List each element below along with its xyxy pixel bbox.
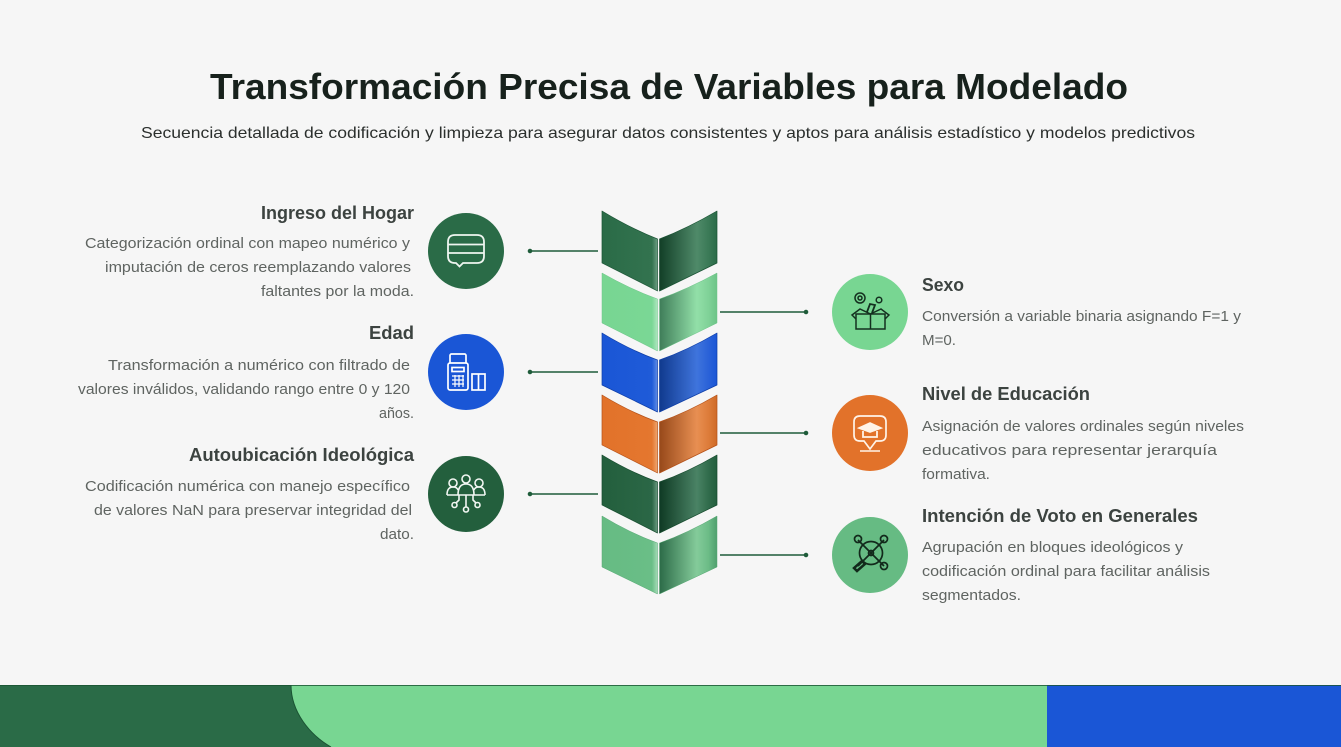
text block: Nivel de Educación: formativa. bbox=[922, 467, 990, 483]
text block: Nivel de Educación: educativos para representar jerarquía bbox=[922, 443, 1218, 459]
text block: Edad bbox=[78, 323, 414, 422]
footer band bbox=[0, 685, 1341, 747]
chevron segment 4: orange bbox=[602, 395, 717, 473]
text block: Edad: Transformación a numérico con filtrado de bbox=[108, 358, 410, 374]
chevron segment 5: dark green bbox=[602, 455, 717, 533]
text block: Intención de Voto en Generales bbox=[922, 506, 1210, 604]
title: Transformación Precisa de Variables para Modelado bbox=[210, 66, 1128, 107]
text block: Ingreso del Hogar: imputación de ceros reemplazando valores bbox=[105, 260, 411, 276]
text block: Edad: Edad bbox=[369, 323, 414, 343]
connector: Intención de Voto bbox=[720, 553, 808, 557]
text block: Sexo: Conversión a variable binaria asignando F=1 y bbox=[922, 309, 1242, 325]
chevron segment 3: blue bbox=[602, 333, 717, 412]
text block: Nivel de Educación: Asignación de valores ordinales según niveles bbox=[922, 419, 1244, 435]
text block: Autoubicación Ideológica: dato. bbox=[380, 527, 414, 543]
connector: Edad bbox=[528, 370, 598, 374]
connector: Nivel de Educación bbox=[720, 431, 808, 435]
text block: Intención de Voto en Generales: Agrupación en bloques ideológicos y bbox=[922, 540, 1184, 556]
text block: Ingreso del Hogar bbox=[85, 203, 414, 300]
text block: Edad: años. bbox=[379, 406, 414, 422]
connector: Autoubicación Ideológica bbox=[528, 492, 598, 496]
icon: Edad, payment terminal bbox=[428, 334, 504, 410]
icon: Intención de Voto, target network bbox=[832, 517, 908, 593]
text block: Ingreso del Hogar: Ingreso del Hogar bbox=[261, 203, 414, 223]
text block: Sexo bbox=[922, 275, 1242, 349]
text block: Edad: valores inválidos, validando rango entre 0 y 120 bbox=[78, 382, 410, 398]
subtitle: Secuencia detallada de codificación y limpieza para asegurar datos consistentes y aptos para análisis estadístico y modelos predictivos bbox=[141, 125, 1195, 142]
connector: Ingreso del Hogar bbox=[528, 249, 598, 253]
text block: Intención de Voto en Generales: codificación ordinal para facilitar análisis bbox=[922, 564, 1210, 580]
text block: Autoubicación Ideológica: Codificación numérica con manejo específico bbox=[85, 479, 410, 495]
text block: Ingreso del Hogar: Categorización ordinal con mapeo numérico y bbox=[85, 236, 411, 252]
text block: Autoubicación Ideológica: de valores NaN para preservar integridad del bbox=[94, 503, 412, 519]
text block: Sexo: Sexo bbox=[922, 275, 964, 295]
text block: Intención de Voto en Generales: Intención de Voto en Generales bbox=[922, 506, 1198, 526]
icon: Autoubicación Ideológica, group network bbox=[428, 456, 504, 532]
icon: Sexo, open box bbox=[832, 274, 908, 350]
chevron segment 6: medium green bbox=[602, 516, 717, 594]
text block: Intención de Voto en Generales: segmentados. bbox=[922, 588, 1021, 604]
text block: Nivel de Educación bbox=[922, 384, 1244, 483]
chevron column bbox=[602, 211, 717, 594]
icon: Nivel de Educación, graduation cap pin bbox=[832, 395, 908, 471]
icon: Ingreso del Hogar, message card bbox=[428, 213, 504, 289]
text block: Ingreso del Hogar: faltantes por la moda. bbox=[261, 284, 414, 300]
text block: Sexo: M=0. bbox=[922, 333, 956, 349]
text block: Autoubicación Ideológica bbox=[85, 445, 415, 543]
text block: Autoubicación Ideológica: Autoubicación Ideológica bbox=[189, 445, 415, 465]
text block: Nivel de Educación: Nivel de Educación bbox=[922, 384, 1090, 404]
connector: Sexo bbox=[720, 310, 808, 314]
chevron segment 2: light green bbox=[602, 273, 717, 351]
chevron segment 1: dark green bbox=[602, 211, 717, 291]
